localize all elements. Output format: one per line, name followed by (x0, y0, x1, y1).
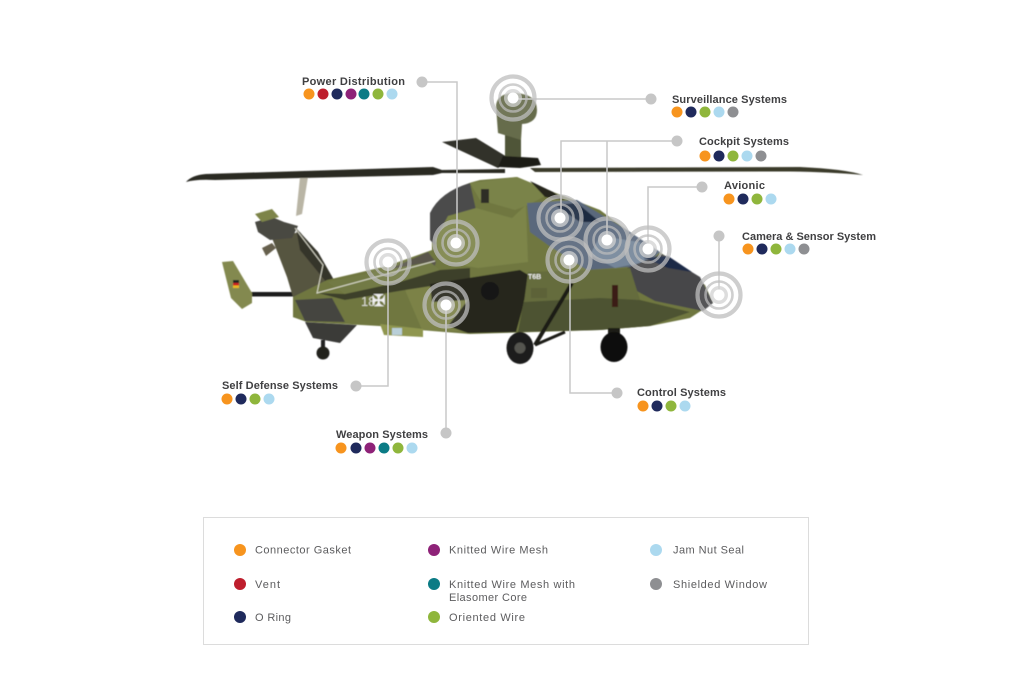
cockpit canopy (527, 200, 660, 270)
target marker: power distribution (434, 222, 478, 264)
fuselage: ✠ (372, 293, 385, 310)
callout: avionic: Avionic (724, 180, 765, 192)
target marker: surveillance (492, 76, 534, 120)
connector lines (356, 82, 719, 433)
callout: surveillance systems: Surveillance Systems (672, 94, 787, 106)
lower dark section (430, 270, 530, 333)
legend item: jam nut seal: Jam Nut Seal (673, 544, 744, 556)
legend item: oriented wire: Oriented Wire (449, 612, 525, 624)
callout: self defense systems: Self Defense Systems (222, 380, 338, 392)
helicopter illustration (186, 93, 863, 364)
callout: camera and sensor system: Camera & Sensor System (742, 231, 876, 243)
landing gear (506, 283, 628, 364)
panel: legend (204, 518, 808, 644)
callout: power distribution (302, 76, 428, 100)
target marker: cockpit left (538, 196, 582, 240)
fuselage (293, 177, 713, 337)
legend item: shielded window: Shielded Window (673, 579, 767, 591)
roundel: 18 (361, 294, 375, 309)
callout: cockpit systems: Cockpit Systems (699, 136, 789, 148)
legend item: knitted wire mesh with elasomer core: Knitted Wire Mesh with (449, 579, 575, 591)
callout: self defense systems (222, 380, 362, 404)
callout: surveillance systems (646, 94, 787, 118)
tail boom camouflage (327, 262, 440, 294)
target marker: weapon (424, 284, 468, 326)
legend item: o ring (234, 611, 291, 624)
legend item: vent (234, 578, 280, 591)
target marker: avionic (626, 228, 670, 270)
callout: avionic (696, 180, 776, 204)
callout: weapon systems: Weapon Systems (336, 429, 428, 441)
callout: power distribution: Power Distribution (302, 76, 405, 88)
callout: cockpit systems (672, 136, 789, 162)
target marker: cockpit right (586, 218, 628, 262)
tail highlight line (295, 228, 435, 293)
engine cowling (430, 183, 476, 245)
legend item: knitted wire mesh with elasomer core (428, 578, 575, 604)
target marker: camera and sensor (698, 274, 740, 316)
folded blade (442, 138, 512, 168)
callout: control systems (612, 387, 726, 412)
tail rotor blade (296, 177, 308, 216)
legend item: vent: Vent (255, 579, 280, 591)
callout: camera and sensor system (714, 230, 876, 254)
horizontal stabiliser (222, 261, 294, 309)
legend item: knitted wire mesh with elasomer core: Elasomer Core (449, 592, 527, 604)
legend item: connector gasket: Connector Gasket (255, 544, 351, 556)
ventral fin and tail wheel (305, 322, 357, 360)
target marker: control (548, 238, 590, 282)
target marker: self defense (366, 240, 410, 284)
tail fin (255, 209, 345, 322)
lower nose (518, 296, 690, 332)
nose (627, 254, 713, 311)
callout: control systems: Control Systems (637, 387, 726, 399)
fuselage: T6B (528, 274, 541, 281)
callout: weapon systems (336, 428, 452, 454)
main rotor blades (186, 167, 863, 182)
legend item: o ring: O Ring (255, 612, 291, 624)
mast and sight (496, 93, 541, 168)
legend item: knitted wire mesh: Knitted Wire Mesh (449, 544, 548, 556)
